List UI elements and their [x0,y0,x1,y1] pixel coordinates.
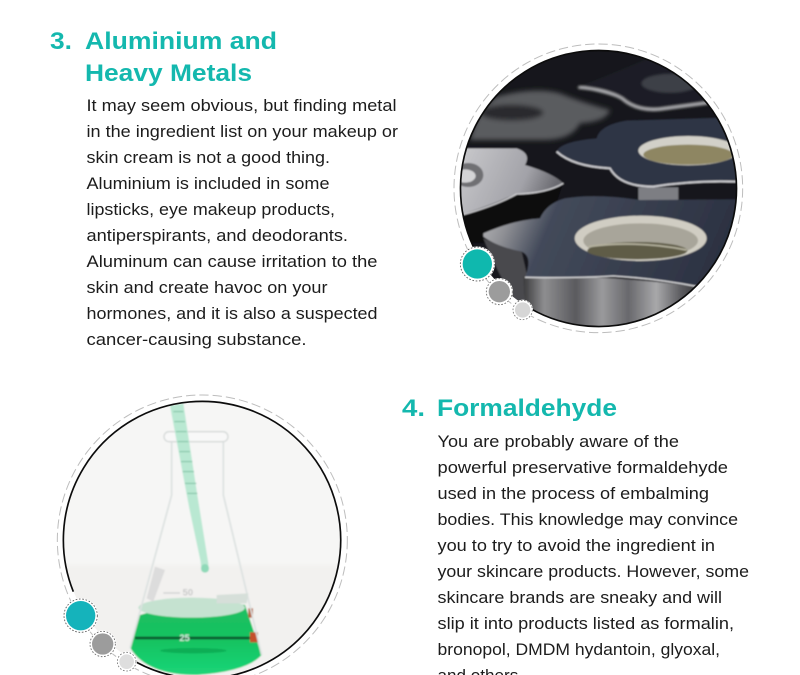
section 4 body text: used in the process of embalming [438,484,709,503]
liquid [131,603,262,675]
section 3 body text: Aluminum can cause irritation to the [86,252,378,271]
middle gear [557,117,738,187]
section 3 heading [50,28,277,87]
section 3 body text: cancer-causing substance. [86,330,306,349]
image outline [460,51,736,327]
photo: flask with green liquid in circle [53,395,353,675]
section 4 heading: Formaldehyde [437,395,617,422]
section 3 heading: Aluminium and [85,28,277,55]
back gear, top right [576,60,708,113]
section 4 body text: your skincare products. However, some [438,562,749,581]
dots [63,598,137,672]
section 3 body text: in the ingredient list on your makeup or [86,122,398,141]
section 4 body text [438,432,749,675]
photo: metal gears in circle [453,43,747,337]
section 4 body text: skincare brands are sneaky and will [438,588,722,607]
section 4 body text: you to try to avoid the ingredient in [438,536,715,555]
front gear chrome side [482,238,527,301]
section 3 body text [86,96,398,349]
section 3 body text: skin and create havoc on your [86,278,328,297]
dots [460,246,533,320]
flask glass [130,442,262,655]
photo: flask with green liquid in circle: 25 [179,633,190,643]
section 4 body text: bronopol, DMDM hydantoin, glyoxal, [438,640,720,659]
section 3 body text: lipsticks, eye makeup products, [86,200,335,219]
section 4 body text: slip it into products listed as formalin, [438,614,734,633]
front gear top surface [483,196,737,286]
section 3 body text: antiperspirants, and deodorants. [86,226,348,245]
section 3 heading: 3. [50,28,72,55]
front gear hole [575,216,707,261]
section 4 heading: 4. [402,395,425,422]
section 4 body text: You are probably aware of the [438,432,679,451]
left bright gear [460,148,563,215]
pipette [170,403,208,572]
section 4 body text: bodies. This knowledge may convince [438,510,738,529]
section 3 heading: Heavy Metals [85,60,252,87]
image outline [63,401,341,675]
back gear, blurred grey [470,91,610,140]
flask markings: 50 [183,588,193,598]
section 4 body text: powerful preservative formaldehyde [438,458,728,477]
section 3 body text: hormones, and it is also a suspected [86,304,378,323]
section 3 body text: It may seem obvious, but finding metal [86,96,396,115]
section 3 body text: Aluminium is included in some [86,174,330,193]
section 3 body text: skin cream is not a good thing. [86,148,330,167]
